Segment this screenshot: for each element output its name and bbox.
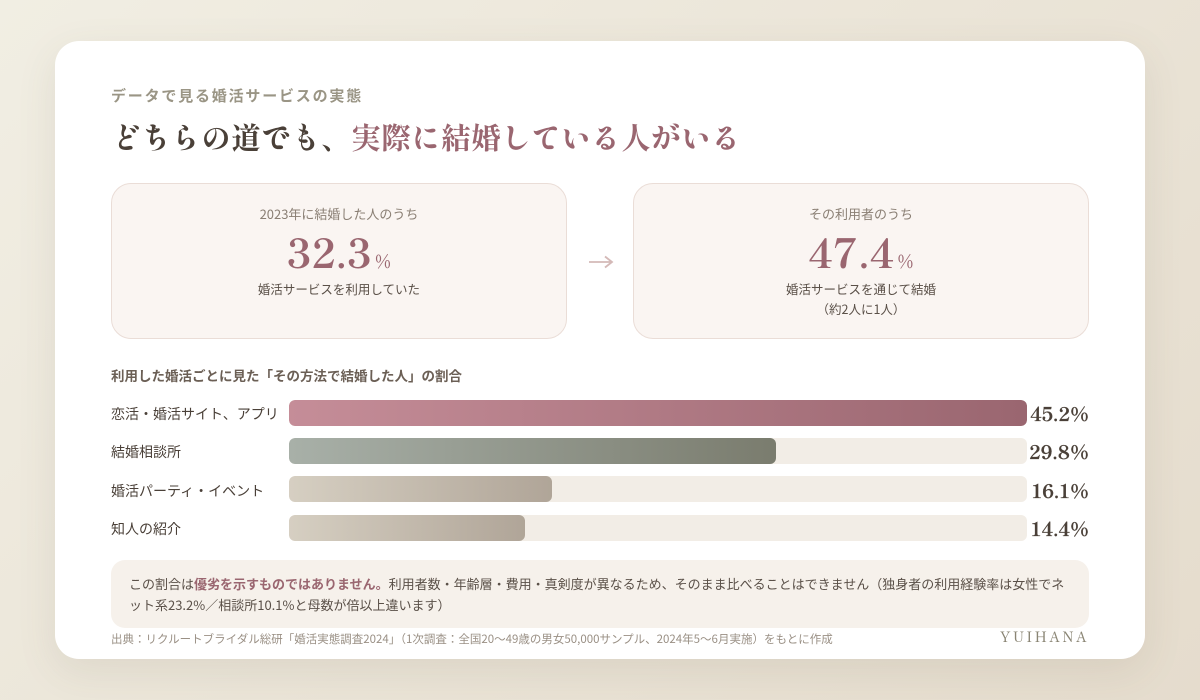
source: 出典：リクルートブライダル総研「婚活実態調査2024」（1次調査：全国20〜49歳の男女50,000サンプル、2024年5〜6月実施）をもとに作成 — [111, 631, 833, 647]
stat description: （約2人に1人） — [817, 299, 905, 318]
bar label 3: 婚活パーティ・イベント — [111, 481, 264, 501]
arrow — [589, 256, 614, 268]
bar label 4: 知人の紹介 — [111, 519, 181, 539]
stat number: 47.4% — [808, 222, 914, 280]
bar value 1: 45.2% — [1030, 400, 1089, 427]
stat number: 32.3% — [287, 222, 391, 280]
bar label 2: 結婚相談所 — [111, 442, 181, 462]
bar label 1: 恋活・婚活サイト、アプリ — [111, 404, 279, 424]
stat caption: その利用者のうち — [809, 204, 913, 223]
eyebrow heading: データで見る婚活サービスの実態 — [111, 85, 363, 106]
stat description — [786, 279, 936, 318]
bar 3 — [289, 476, 1027, 502]
stat description: 婚活サービスを利用していた — [258, 279, 420, 298]
bar value 3: 16.1% — [1031, 477, 1089, 504]
note panel: この割合は優劣を示すものではありません。利用者数・年齢層・費用・真剣度が異なるため、そのまま比べることはできません（独身者の利用経験率は女性でネット系23.2%／相談所10.1%と母数が倍以上違います） — [129, 574, 1064, 614]
brand: YUIHANA — [1000, 627, 1089, 647]
stat caption: 2023年に結婚した人のうち — [260, 204, 418, 223]
note panel — [111, 560, 1089, 628]
panel: stat left — [111, 183, 567, 339]
bar 1 — [289, 400, 1027, 426]
chart heading: 利用した婚活ごとに見た「その方法で結婚した人」の割合 — [111, 365, 462, 385]
panel: stat right — [633, 183, 1089, 339]
stat description: 婚活サービスを通じて結婚 — [786, 279, 936, 298]
title: どちらの道でも、実際に結婚している人がいる — [111, 114, 741, 158]
bar value 4: 14.4% — [1031, 515, 1089, 542]
bar 4 — [289, 515, 1027, 541]
bar value 2: 29.8% — [1029, 438, 1089, 465]
bar 2 — [289, 438, 1027, 464]
